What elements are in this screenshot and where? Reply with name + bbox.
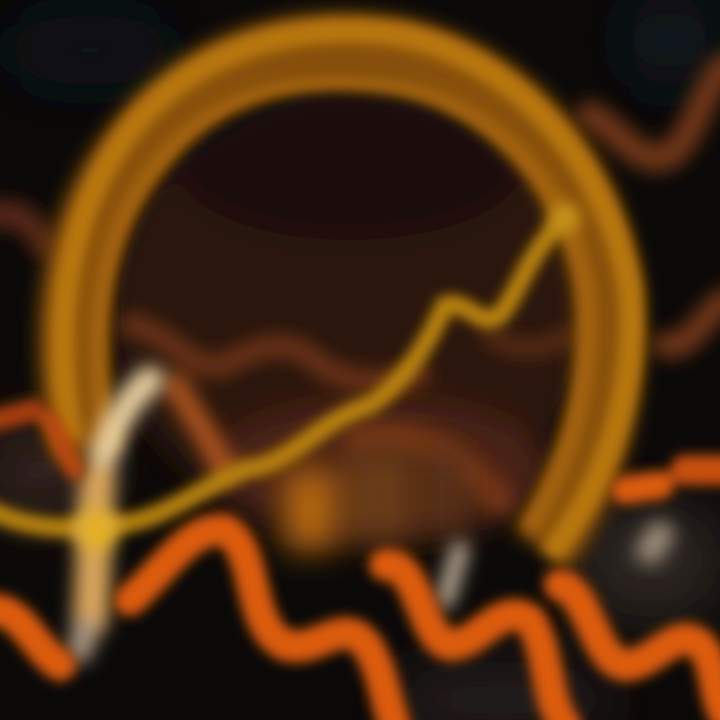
golden ring	[63, 31, 631, 555]
gold nodes	[77, 204, 579, 550]
ring interior	[110, 90, 590, 540]
ring: inner band	[98, 82, 588, 530]
ring: outer soft body	[72, 47, 610, 550]
background chart lines inside ring	[130, 325, 570, 500]
rising gold trend line	[0, 218, 565, 528]
side background lines	[0, 65, 720, 346]
bottom centre candles	[285, 450, 465, 550]
ring: bright outer band	[63, 31, 631, 555]
vertical pale highlight	[80, 380, 660, 650]
orange wave lines	[0, 410, 720, 720]
